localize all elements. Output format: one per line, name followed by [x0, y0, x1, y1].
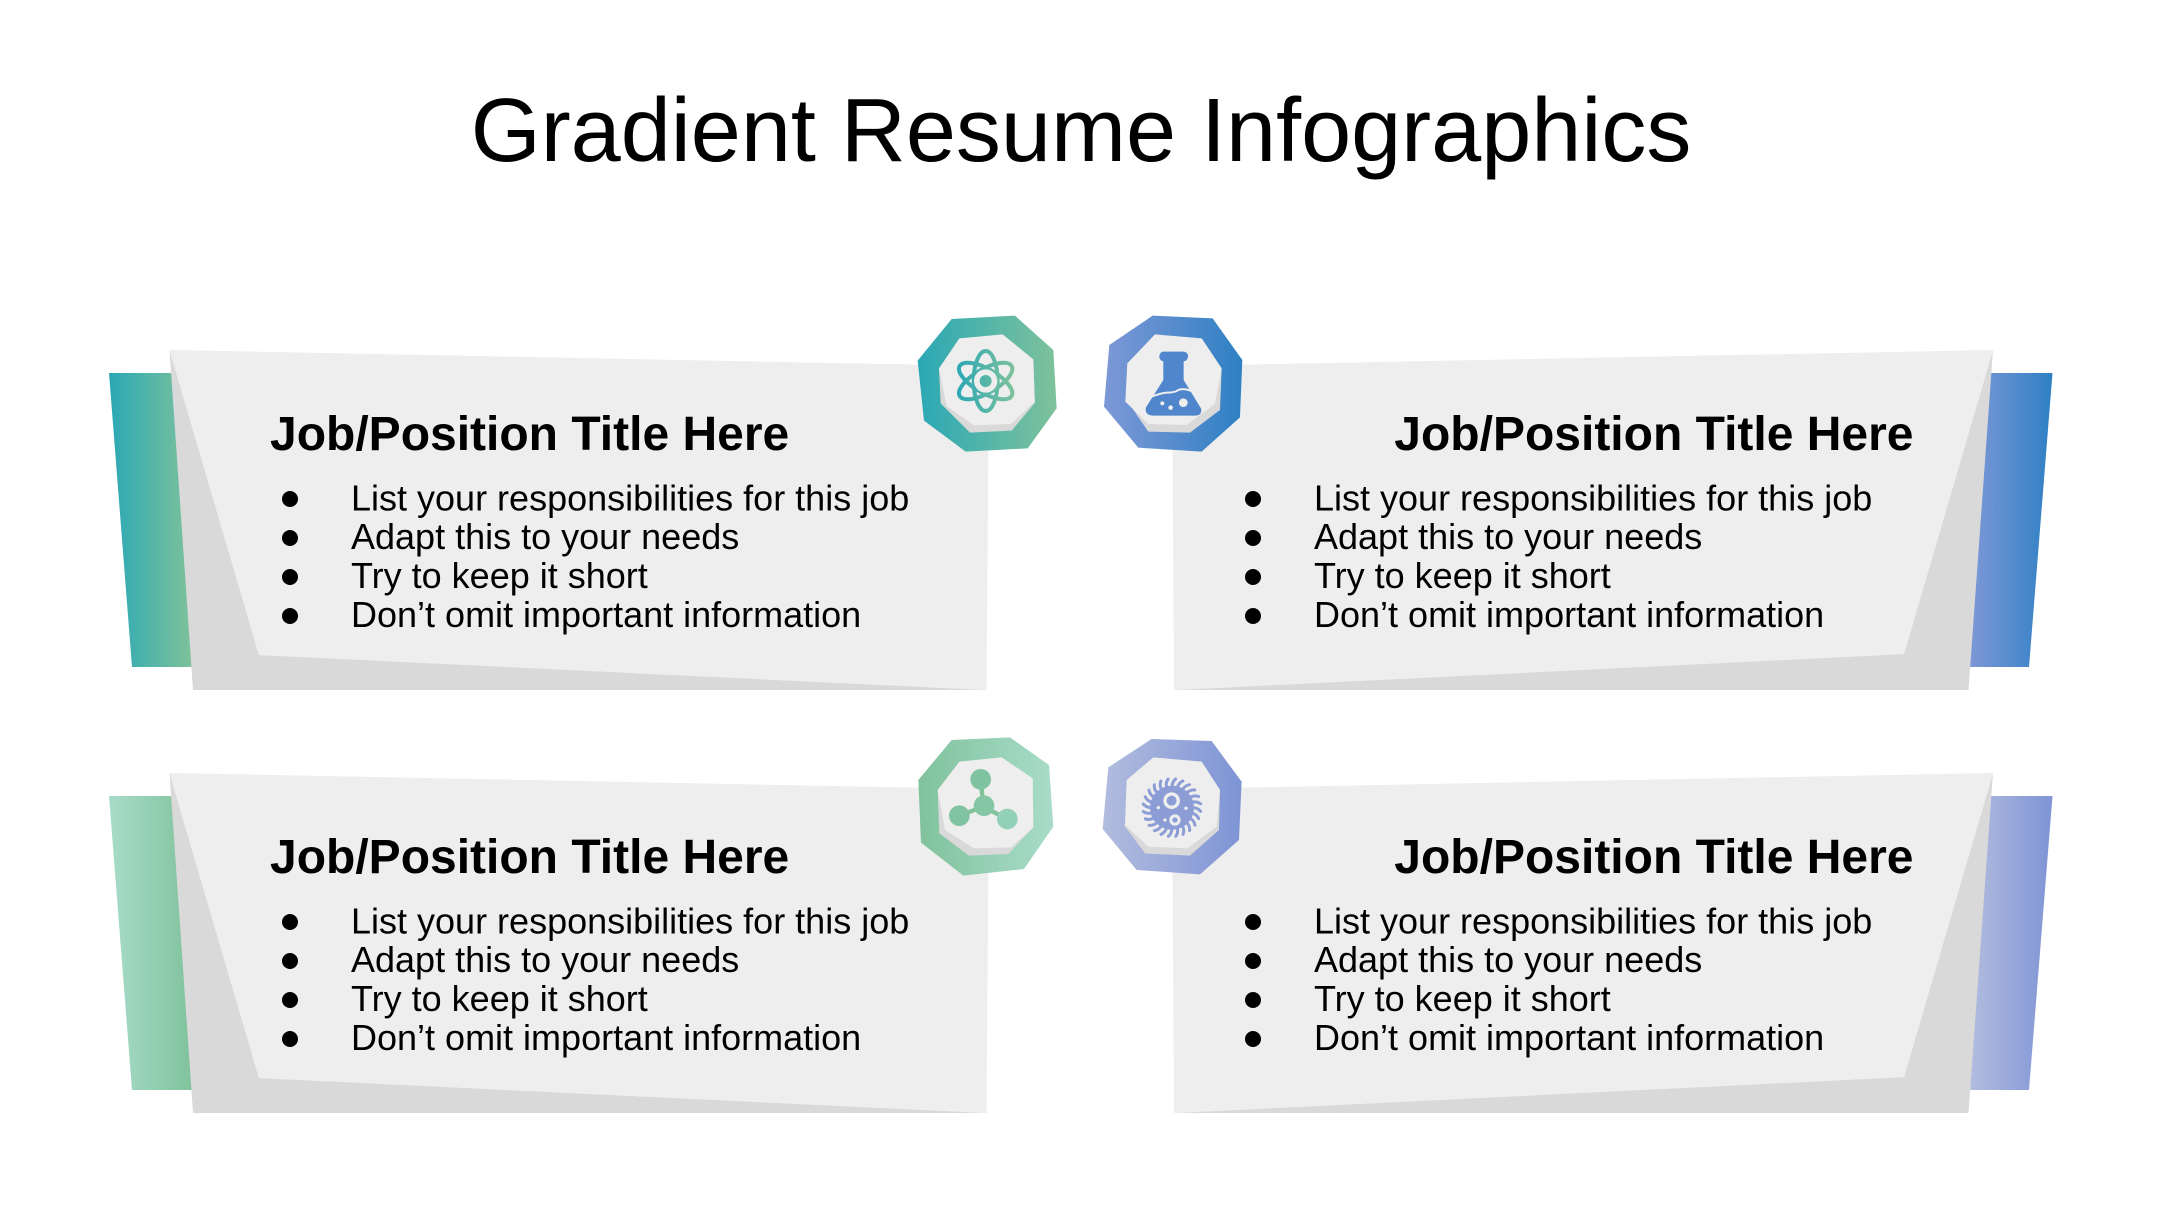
responsibilities list	[1245, 478, 1872, 635]
responsibilities list: Try to keep it short	[351, 978, 648, 1019]
responsibilities list: Try to keep it short	[1314, 555, 1611, 596]
panel: job 4	[1103, 739, 2052, 1113]
panel: job 1	[109, 316, 1057, 690]
title: Gradient Resume Infographics	[471, 81, 1691, 181]
responsibilities list: Try to keep it short	[1314, 978, 1611, 1019]
responsibilities list: List your responsibilities for this job	[351, 478, 909, 518]
responsibilities list: Adapt this to your needs	[351, 939, 739, 980]
responsibilities list: Don’t omit important information	[1314, 1017, 1824, 1058]
responsibilities list	[282, 900, 909, 1058]
card shadow	[170, 350, 986, 690]
icon: molecule	[949, 769, 1018, 829]
responsibilities list: Adapt this to your needs	[1314, 516, 1702, 557]
responsibilities list	[282, 478, 909, 635]
responsibilities list	[1245, 900, 1872, 1058]
responsibilities list: List your responsibilities for this job	[351, 900, 909, 942]
gradient strip	[109, 373, 193, 667]
responsibilities list: Adapt this to your needs	[351, 516, 739, 557]
responsibilities list: Try to keep it short	[351, 555, 648, 596]
card shadow	[170, 773, 986, 1113]
gradient strip	[1970, 796, 2052, 1090]
responsibilities list: List your responsibilities for this job	[1314, 900, 1872, 942]
gradient strip	[109, 796, 193, 1090]
card face	[170, 350, 989, 690]
responsibilities list: Don’t omit important information	[1314, 594, 1824, 635]
responsibilities list: Adapt this to your needs	[1314, 939, 1702, 980]
card face	[170, 773, 989, 1113]
gradient strip	[1970, 373, 2052, 667]
responsibilities list: Don’t omit important information	[351, 594, 861, 635]
responsibilities list: List your responsibilities for this job	[1314, 478, 1872, 518]
icon: virus	[1143, 779, 1201, 836]
card face	[1172, 773, 1993, 1113]
job title: Job/Position Title Here	[270, 408, 789, 461]
panel: job 3	[109, 737, 1053, 1113]
card face	[1172, 350, 1993, 690]
icon badge: molecule	[918, 737, 1053, 876]
card shadow	[1174, 350, 1993, 690]
card shadow	[1174, 773, 1993, 1113]
job title: Job/Position Title Here	[1394, 831, 1914, 884]
icon: flask	[1146, 352, 1201, 416]
icon badge: atom	[918, 316, 1057, 452]
icon badge: flask	[1104, 316, 1242, 452]
job title: Job/Position Title Here	[1394, 408, 1914, 461]
panel: job 2	[1104, 316, 2052, 690]
responsibilities list: Don’t omit important information	[351, 1017, 861, 1058]
icon badge: virus	[1103, 739, 1242, 874]
icon: atom	[959, 351, 1012, 411]
job title: Job/Position Title Here	[270, 831, 789, 884]
